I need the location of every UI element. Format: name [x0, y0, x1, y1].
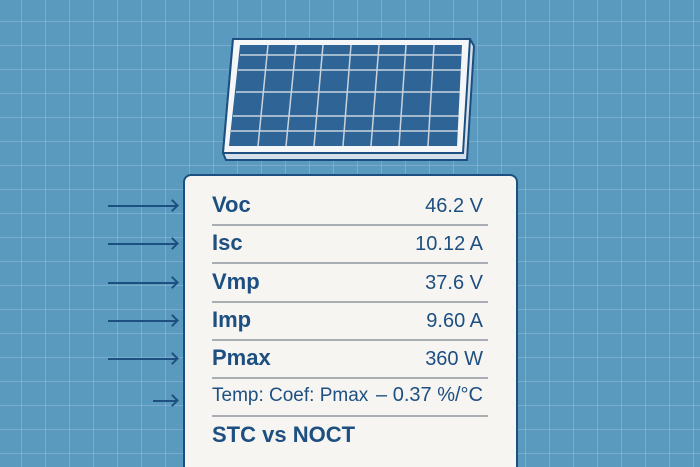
row: Vmp [212, 269, 483, 294]
row: Temp coefficient: Temp: Coef: Pmax [212, 385, 368, 406]
row: Imp: Imp [212, 307, 251, 332]
row: Temp coefficient: – 0.37 %/°C [376, 384, 483, 406]
row: Vmp: Vmp [212, 269, 260, 294]
row: Isc [212, 230, 483, 255]
row: Pmax [212, 345, 483, 370]
arrow: Imp [108, 320, 176, 322]
panel: specs [183, 174, 518, 467]
arrow: Voc [108, 205, 176, 207]
row: Isc: 10.12 A [415, 233, 483, 255]
arrow: Vmp [108, 282, 176, 284]
row: Pmax: Pmax [212, 345, 271, 370]
row: Voc: Voc [212, 192, 251, 217]
row: Vmp: 37.6 V [425, 272, 483, 294]
row: Pmax: 360 W [425, 348, 483, 370]
row: Imp [212, 307, 483, 332]
row: Voc: 46.2 V [425, 195, 483, 217]
heading: STC vs NOCT: STC vs NOCT [212, 422, 355, 447]
arrow: Temp [153, 400, 176, 402]
arrow: Isc [108, 243, 176, 245]
row: Imp: 9.60 A [426, 310, 483, 332]
row: Temp coefficient [212, 384, 483, 406]
icon: solar panel [222, 38, 475, 161]
row: Isc: Isc [212, 230, 243, 255]
row: Voc [212, 192, 483, 217]
arrow: Pmax [108, 358, 176, 360]
